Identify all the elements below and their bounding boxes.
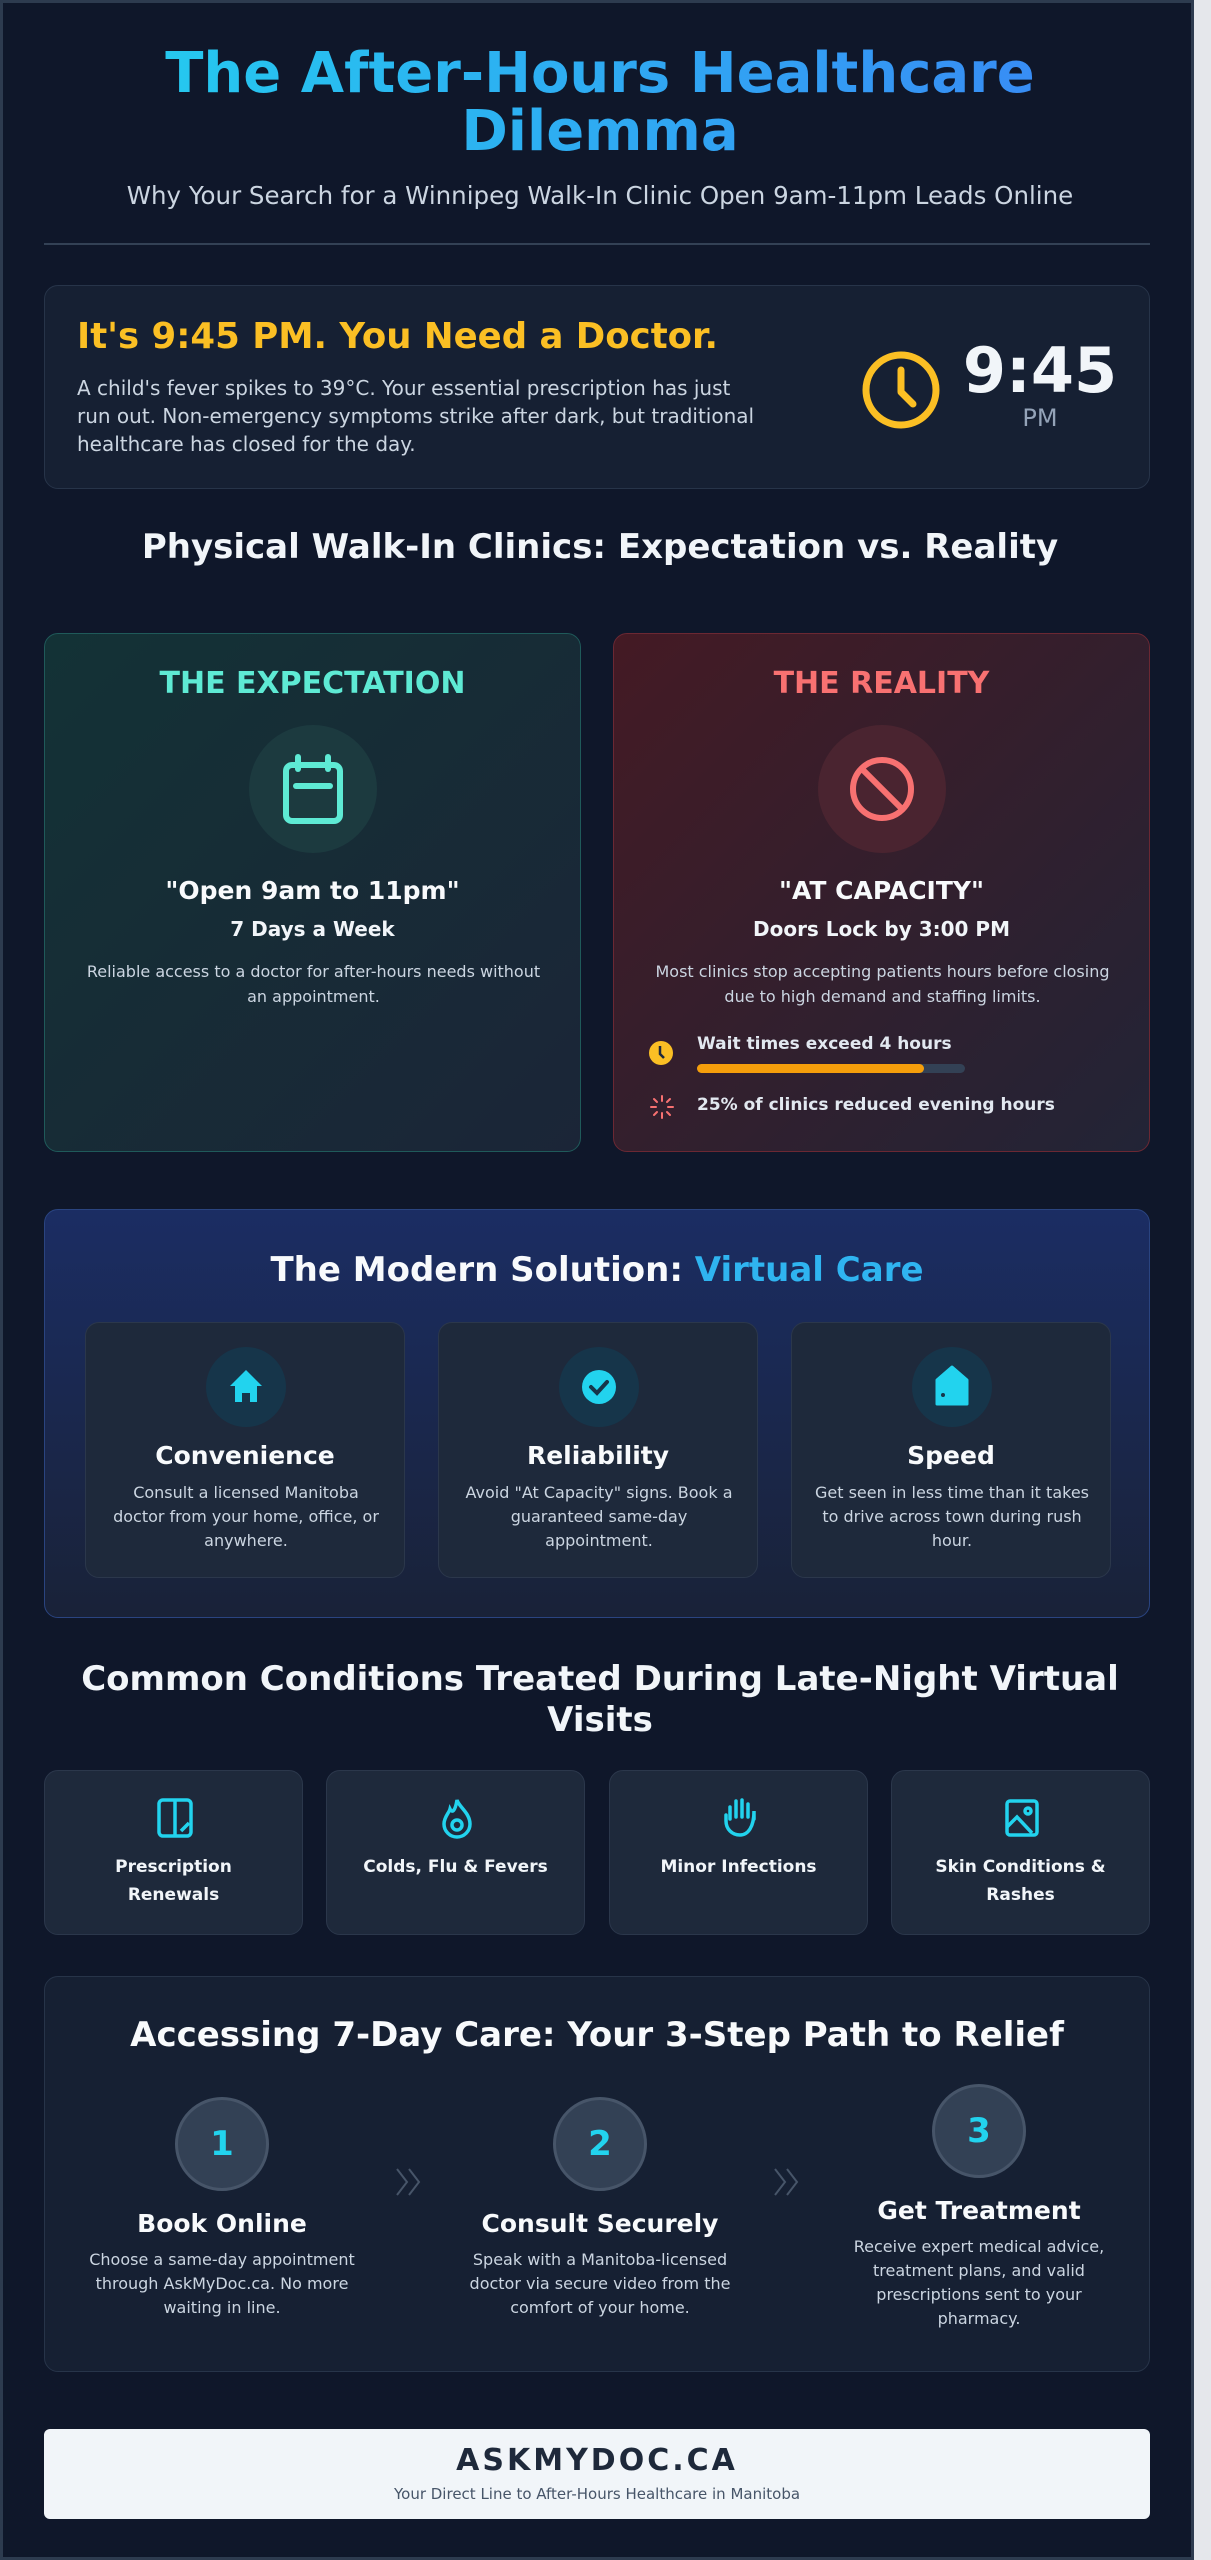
condition cards: [44, 1770, 1150, 1935]
scenario heading: It's 9:45 PM. You Need a Doctor.: [77, 316, 718, 357]
steps heading: Accessing 7-Day Care: Your 3-Step Path to Relief: [130, 2015, 1064, 2055]
step 3: Get Treatment: [877, 2196, 1081, 2225]
subtitle: Why Your Search for a Winnipeg Walk-In Clinic Open 9am-11pm Leads Online: [127, 181, 1073, 210]
condition: skin conditions: Skin Conditions &: [935, 1857, 1106, 1877]
step 3: 3: [967, 2111, 991, 2151]
step 3: Receive expert medical advice, treatment plans, and valid prescriptions sent to your pharmacy.: [854, 2237, 1104, 2328]
footer: [44, 2429, 1150, 2519]
step 1: 1: [210, 2124, 234, 2164]
step 1: [89, 2097, 355, 2317]
step 2: Speak with a Manitoba-licensed doctor via secure video from the comfort of your home.: [470, 2250, 730, 2317]
stat: wait times: [649, 1034, 965, 1073]
card: reliability: Avoid "At Capacity" signs. Book a guaranteed same-day appointment.: [466, 1483, 732, 1550]
condition: minor infections: Minor Infections: [660, 1857, 817, 1877]
step 1: Choose a same-day appointment through AskMyDoc.ca. No more waiting in line.: [89, 2250, 355, 2317]
stat: reduced hours: 25% of clinics reduced evening hours: [697, 1095, 1055, 1115]
card: speed: Get seen in less time than it takes to drive across town during rush hour.: [815, 1483, 1089, 1550]
title: The After-Hours Healthcare: [165, 41, 1035, 106]
heading: common conditions: Visits: [547, 1700, 653, 1740]
expectation title: THE EXPECTATION: [160, 666, 465, 701]
card: speed: [791, 1322, 1111, 1578]
title: [3, 45, 1197, 161]
time display: 9:45: [963, 334, 1117, 407]
reality title: THE REALITY: [774, 666, 989, 701]
solution heading: The Modern Solution: Virtual Care: [270, 1250, 924, 1290]
condition: skin conditions: [891, 1770, 1150, 1935]
heading: expectation vs reality: Physical Walk-In Clinics: Expectation vs. Reality: [142, 527, 1058, 567]
card: convenience: [85, 1322, 405, 1578]
card: reliability: Reliability: [527, 1441, 669, 1470]
card: convenience: Consult a licensed Manitoba doctor from your home, office, or anywhere.: [113, 1483, 379, 1550]
arrow 2: [774, 2168, 798, 2196]
condition: skin conditions: Rashes: [986, 1885, 1055, 1905]
card: speed: Speed: [907, 1441, 995, 1470]
expectation quote: "Open 9am to 11pm": [165, 876, 460, 905]
condition: prescription renewals: Renewals: [128, 1885, 219, 1905]
panel: 3-step path: [44, 1976, 1150, 2372]
step 2: Consult Securely: [482, 2209, 718, 2238]
condition: colds flu fevers: Colds, Flu & Fevers: [363, 1857, 548, 1877]
icon: prohibited: [818, 725, 946, 853]
reality text: Most clinics stop accepting patients hours before closing due to high demand and staffing limits.: [655, 962, 1110, 1006]
reality quote: "AT CAPACITY": [779, 876, 984, 905]
tagline: Your Direct Line to After-Hours Healthcare in Manitoba: [394, 2485, 800, 2503]
card: convenience: Convenience: [155, 1441, 335, 1470]
condition: prescription renewals: [44, 1770, 303, 1935]
scenario text: A child's fever spikes to 39°C. Your essential prescription has just run out. Non-emergency symptoms strike after dark, but traditional healthcare has closed for the day.: [77, 376, 754, 456]
brand name: ASKMYDOC.CA: [456, 2443, 738, 2478]
arrow 1: [396, 2168, 420, 2196]
step 1: Book Online: [137, 2209, 307, 2238]
time display: PM: [1022, 404, 1058, 432]
card: reliability: [438, 1322, 758, 1578]
step 3: [854, 2084, 1104, 2328]
icon: calendar: [249, 725, 377, 853]
panel: reality: [613, 633, 1150, 1152]
panel: expectation: [44, 633, 581, 1152]
icon: clock: [862, 352, 940, 428]
step 2: 2: [588, 2124, 612, 2164]
expectation subline: 7 Days a Week: [230, 917, 395, 941]
panel: virtual care solution: [44, 1209, 1150, 1618]
heading: common conditions: [81, 1659, 1119, 1740]
condition: colds flu fevers: [326, 1770, 585, 1935]
reality subline: Doors Lock by 3:00 PM: [753, 917, 1010, 941]
step 2: [470, 2097, 730, 2317]
panel: scenario: [44, 285, 1150, 489]
condition: prescription renewals: Prescription: [115, 1857, 232, 1877]
expectation text: Reliable access to a doctor for after-hours needs without an appointment.: [87, 962, 540, 1006]
title: Dilemma: [461, 99, 739, 164]
heading: common conditions: Common Conditions Treated During Late-Night Virtual: [81, 1659, 1119, 1699]
stat: wait times: Wait times exceed 4 hours: [697, 1034, 952, 1054]
condition: minor infections: [609, 1770, 868, 1935]
